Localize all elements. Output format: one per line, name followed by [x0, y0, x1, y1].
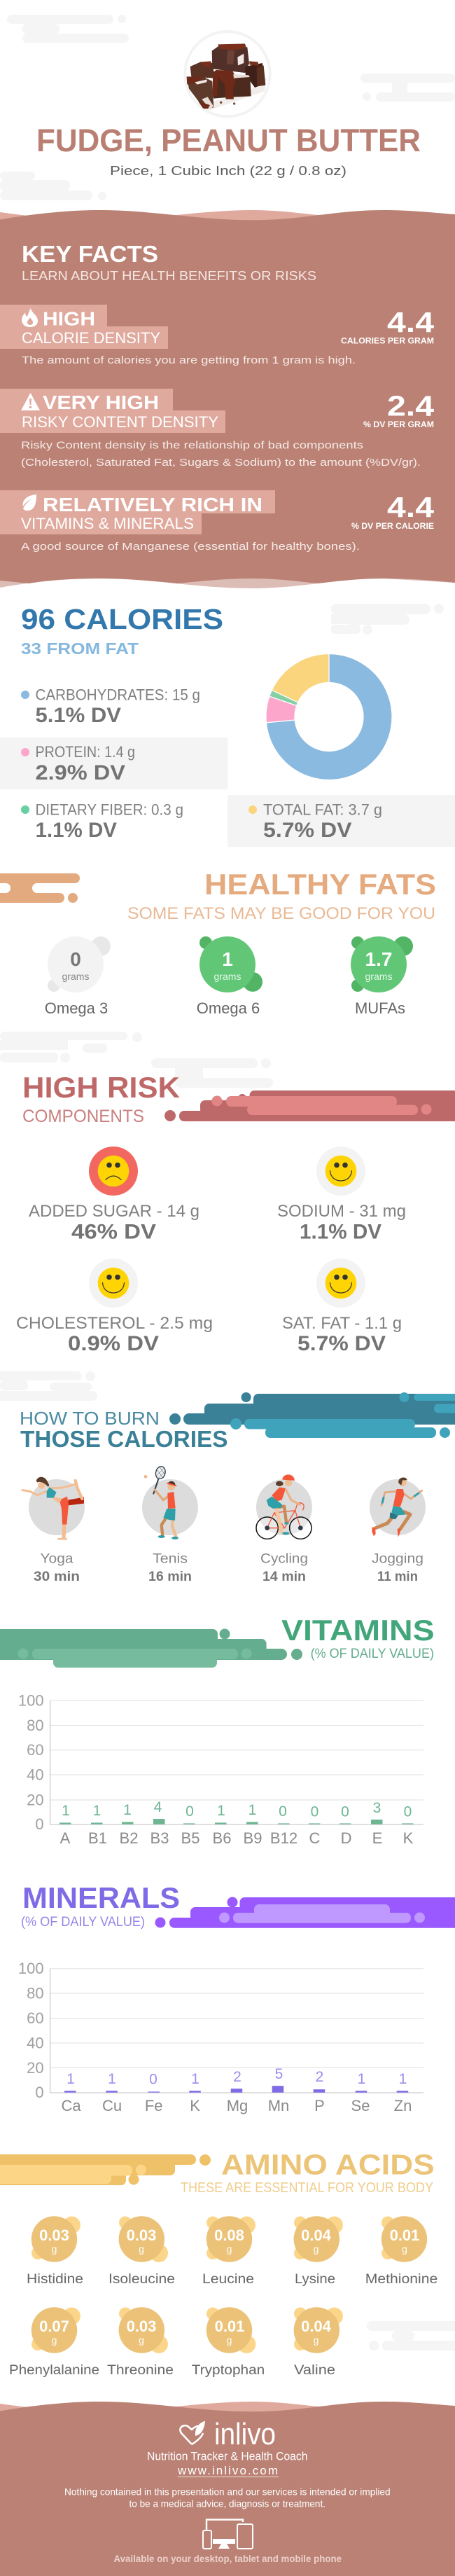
bar chart: vitamins: 1 [123, 1802, 132, 1818]
calories heading: 96 CALORIES [21, 603, 223, 635]
amino acids heading: AMINO ACIDS [221, 2149, 435, 2181]
icon: happy face [316, 1259, 365, 1308]
amino: histidine [27, 2216, 83, 2287]
footer panel [0, 2402, 455, 2576]
calories from fat: 33 FROM FAT [21, 639, 139, 658]
bar chart: vitamins: B3 [150, 1829, 169, 1847]
fact: relatively rich in vitamins and minerals: VITAMINS & MINERALS [21, 515, 194, 532]
amino: threonine: Threonine [107, 2363, 174, 2378]
amino: methionine: 0.01 [390, 2227, 419, 2244]
stat: total fat: 5.7% DV [263, 819, 351, 842]
icon: happy face [316, 1147, 365, 1196]
bar chart: vitamins: 20 [27, 1792, 44, 1808]
decorative band [0, 873, 80, 903]
amino: tryptophan: Tryptophan [192, 2363, 265, 2378]
decorative band [0, 2154, 211, 2185]
icon: sad face [89, 1147, 138, 1196]
bar chart: vitamins: B1 [88, 1829, 107, 1847]
fact: high calorie density: CALORIES PER GRAM [341, 336, 434, 346]
bar chart: vitamins: 1 [62, 1803, 70, 1819]
amino acids subheading: THESE ARE ESSENTIAL FOR YOUR BODY [181, 2180, 433, 2196]
bar chart: minerals [18, 1960, 424, 2114]
amino: histidine: Histidine [27, 2272, 83, 2287]
activity: jogging: Jogging [372, 1552, 424, 1566]
icon: yoga figure [22, 1477, 85, 1539]
badge: mufas: grams [365, 971, 392, 982]
badge: omega 6: grams [214, 971, 241, 982]
bar chart: vitamins: 0 [279, 1803, 287, 1820]
decorative band [155, 1897, 455, 1928]
amino: isoleucine [108, 2216, 175, 2287]
panel: high risk components [16, 1071, 455, 1355]
fact: relatively rich in vitamins and minerals: % DV PER CALORIE [351, 521, 434, 531]
amino: phenylalanine [9, 2307, 99, 2378]
amino: valine: g [314, 2334, 318, 2346]
fact: very high risky content density [0, 389, 434, 469]
activity: cycling [256, 1474, 312, 1584]
icon: cycling figure [256, 1474, 312, 1539]
stat: protein [21, 743, 135, 784]
amino: threonine [107, 2307, 174, 2378]
decorative cloud: amino [367, 2321, 455, 2350]
decorative band [169, 1392, 455, 1438]
bar chart: vitamins: 0 [186, 1803, 194, 1820]
stat: dietary fiber: 1.1% DV [35, 819, 117, 842]
bar chart: minerals: 2 [316, 2069, 323, 2085]
risk: sodium: SODIUM - 31 mg [277, 1202, 406, 1221]
decorative cloud: calories [331, 604, 444, 635]
bar chart: vitamins: 3 [373, 1800, 381, 1816]
activity: cycling: Cycling [260, 1552, 308, 1566]
bar chart: minerals: Mg [227, 2097, 248, 2114]
bar chart: minerals: 60 [27, 2009, 44, 2027]
activity: yoga [22, 1477, 85, 1584]
fact: high calorie density [0, 305, 434, 366]
stat: protein: 2.9% DV [35, 761, 125, 784]
activity: yoga: 30 min [34, 1570, 80, 1584]
bar chart: vitamins: 1 [248, 1802, 256, 1818]
bar chart: minerals: P [314, 2097, 325, 2114]
amino: lysine [294, 2216, 343, 2287]
vitamins subheading: (% OF DAILY VALUE) [311, 1647, 434, 1661]
bar chart: minerals: 0 [35, 2084, 44, 2101]
icon: leaf [23, 494, 36, 511]
fact: very high risky content density: (Cholesterol, Saturated Fat, Sugars & Sodium) to the amount (%DV/gr). [21, 457, 421, 469]
amino: methionine [365, 2216, 438, 2287]
decorative band [164, 1090, 455, 1121]
bar chart: minerals: 100 [18, 1960, 44, 1977]
badge: mufas: MUFAs [355, 999, 405, 1017]
risk: saturated fat: 5.7% DV [298, 1332, 386, 1355]
bar chart: minerals: 0 [149, 2072, 158, 2088]
fact: very high risky content density: VERY HIGH [43, 392, 159, 413]
badge: omega 6 [197, 936, 262, 1017]
risk: added sugar: 46% DV [71, 1220, 156, 1244]
fact: relatively rich in vitamins and minerals: 4.4 [387, 491, 434, 523]
activity: tennis: Tenis [153, 1552, 188, 1566]
stat: total fat [248, 801, 382, 842]
stat: carbohydrates [21, 686, 200, 727]
amino: phenylalanine: g [52, 2334, 57, 2346]
row backgrounds [0, 738, 455, 847]
icon: jogging figure [370, 1478, 426, 1537]
bar chart: minerals: 1 [191, 2071, 200, 2087]
bar chart: vitamins: 1 [217, 1803, 225, 1819]
bar chart: vitamins: 40 [27, 1766, 44, 1783]
bar chart: vitamins: 0 [341, 1804, 349, 1820]
key facts heading: KEY FACTS [22, 241, 158, 267]
disclaimer: Nothing contained in this presentation and our services is intended or implied [64, 2486, 391, 2498]
badge: omega 3: Omega 3 [45, 999, 108, 1017]
bar chart: minerals: 40 [27, 2034, 44, 2052]
bar chart: minerals: Se [351, 2097, 370, 2114]
website link: www.inlivo.com [177, 2464, 278, 2477]
fact: very high risky content density: % DV PER GRAM [363, 420, 434, 429]
stat: carbohydrates: CARBOHYDRATES: 15 g [35, 686, 200, 703]
bar chart: minerals: 80 [27, 1985, 44, 2002]
risk: saturated fat: SAT. FAT - 1.1 g [282, 1314, 402, 1333]
badge: omega 3: grams [62, 971, 89, 982]
fact: relatively rich in vitamins and minerals: A good source of Manganese (essential for healthy bones). [21, 541, 360, 553]
food photo: fudge brownies [185, 32, 270, 116]
bar chart: minerals: Ca [62, 2097, 81, 2114]
high risk heading: HIGH RISK [22, 1071, 180, 1104]
risk: sodium [277, 1147, 406, 1244]
stat: total fat: TOTAL FAT: 3.7 g [263, 801, 382, 818]
disclaimer [64, 2486, 391, 2509]
fact: high calorie density: HIGH [43, 308, 95, 329]
bar chart: vitamins: 60 [27, 1741, 44, 1759]
panel: minerals [18, 1881, 455, 2114]
amino: phenylalanine: 0.07 [39, 2318, 69, 2335]
amino: lysine: g [314, 2243, 318, 2255]
panel: how to burn those calories [20, 1392, 455, 1584]
bar chart: minerals: Cu [102, 2097, 122, 2114]
badge: omega 6: 1 [222, 948, 233, 970]
risk: saturated fat [282, 1259, 402, 1355]
bar chart: vitamins: B2 [120, 1829, 138, 1847]
icon: happy face [89, 1259, 138, 1308]
risk: cholesterol: CHOLESTEROL - 2.5 mg [16, 1314, 213, 1333]
availability note: Available on your desktop, tablet and mobile phone [113, 2554, 342, 2564]
amino: histidine: g [52, 2243, 57, 2255]
badge: omega 3: 0 [70, 948, 81, 970]
amino: tryptophan: 0.01 [215, 2318, 244, 2335]
fact: high calorie density: The amount of calories you are getting from 1 gram is high. [22, 354, 356, 366]
fact: very high risky content density: RISKY CONTENT DENSITY [22, 413, 218, 431]
bar chart: vitamins: C [309, 1829, 321, 1847]
activity: jogging: 11 min [377, 1570, 418, 1584]
amino: leucine: g [227, 2243, 232, 2255]
stat: dietary fiber: DIETARY FIBER: 0.3 g [35, 801, 183, 818]
amino: valine: 0.04 [301, 2318, 332, 2335]
bar chart: vitamins: K [403, 1829, 414, 1847]
fact: high calorie density: CALORIE DENSITY [22, 329, 160, 347]
fact: relatively rich in vitamins and minerals [0, 490, 434, 553]
activity: tennis: 16 min [148, 1570, 192, 1584]
panel: calories [0, 603, 455, 847]
decorative band [0, 1629, 302, 1668]
icon: devices [203, 2520, 253, 2549]
badge: omega 6: Omega 6 [197, 999, 260, 1017]
panel: key facts [0, 210, 455, 588]
amino: valine [294, 2307, 343, 2378]
risk: sodium: 1.1% DV [300, 1220, 382, 1244]
bar chart: vitamins: 0 [404, 1804, 412, 1820]
key facts subheading: LEARN ABOUT HEALTH BENEFITS OR RISKS [22, 269, 316, 283]
amino: tryptophan: g [227, 2334, 232, 2346]
minerals heading: MINERALS [22, 1881, 180, 1914]
stat: dietary fiber [21, 801, 183, 842]
bar chart: minerals: 2 [233, 2069, 241, 2085]
bar chart: vitamins: 0 [35, 1815, 44, 1833]
bar chart: vitamins: 4 [154, 1799, 162, 1815]
activity: jogging [370, 1478, 426, 1584]
amino: tryptophan [192, 2307, 265, 2378]
those calories heading: THOSE CALORIES [20, 1426, 228, 1452]
badge: omega 3 [45, 936, 111, 1017]
risk: added sugar: ADDED SUGAR - 14 g [29, 1202, 200, 1221]
panel: amino acids [0, 2149, 438, 2378]
fact: very high risky content density: Risky Content density is the relationship of bad components [21, 440, 363, 451]
bar chart: vitamins: A [60, 1829, 71, 1847]
components subheading: COMPONENTS [22, 1107, 144, 1126]
activity: yoga: Yoga [41, 1552, 74, 1566]
bar chart: minerals: Mn [268, 2097, 289, 2114]
fact: high calorie density: 4.4 [387, 306, 434, 338]
how to burn heading: HOW TO BURN [20, 1408, 160, 1429]
badge: mufas: 1.7 [365, 948, 392, 970]
decorative clouds: high risk [0, 1032, 273, 1088]
bar chart: minerals: K [190, 2097, 200, 2114]
bar chart: vitamins: B12 [270, 1829, 298, 1847]
amino: methionine: Methionine [365, 2272, 438, 2287]
bar chart: vitamins: 1 [93, 1803, 101, 1819]
amino: leucine: 0.08 [214, 2227, 244, 2244]
panel: healthy fats [0, 868, 436, 1017]
activity: cycling: 14 min [262, 1570, 306, 1584]
bar chart: vitamins [18, 1692, 424, 1847]
bar chart: vitamins: 100 [18, 1692, 44, 1709]
bar chart: vitamins: B9 [244, 1829, 262, 1847]
activity: tennis [142, 1465, 198, 1584]
fact: very high risky content density: 2.4 [387, 389, 434, 422]
panel: vitamins [0, 1614, 435, 1847]
bar chart: minerals: Zn [394, 2097, 412, 2114]
fact: relatively rich in vitamins and minerals: RELATIVELY RICH IN [43, 494, 262, 515]
amino: leucine: Leucine [202, 2272, 254, 2287]
amino: histidine: 0.03 [39, 2227, 69, 2244]
decorative cloud: burn [0, 1371, 97, 1401]
risk: added sugar [29, 1147, 200, 1244]
bar chart: vitamins: D [341, 1829, 352, 1847]
bar chart: minerals: 5 [275, 2066, 283, 2082]
amino: methionine: g [402, 2243, 407, 2255]
icon: inlivo logo heart [180, 2421, 205, 2444]
icon: warning [21, 393, 40, 410]
bar chart: vitamins: 80 [27, 1717, 44, 1734]
amino: threonine: g [139, 2334, 144, 2346]
stat: protein: PROTEIN: 1.4 g [35, 743, 135, 761]
bar chart: minerals: 1 [108, 2071, 116, 2087]
amino: isoleucine: 0.03 [127, 2227, 156, 2244]
bar chart: vitamins: E [372, 1829, 382, 1847]
amino: lysine: Lysine [295, 2272, 335, 2287]
bar chart: minerals: 1 [399, 2071, 407, 2087]
icon: tennis figure [142, 1465, 198, 1539]
decorative clouds: top [0, 15, 455, 200]
tagline: Nutrition Tracker & Health Coach [147, 2450, 308, 2463]
donut chart [266, 654, 392, 780]
bar chart: vitamins: B6 [213, 1829, 231, 1847]
amino: phenylalanine: Phenylalanine [9, 2363, 99, 2378]
amino: leucine [202, 2216, 255, 2287]
serving subtitle: Piece, 1 Cubic Inch (22 g / 0.8 oz) [110, 164, 346, 178]
healthy fats heading: HEALTHY FATS [204, 868, 436, 901]
logo wordmark: inlivo [214, 2417, 276, 2451]
amino: lysine: 0.04 [301, 2227, 332, 2244]
amino: threonine: 0.03 [127, 2318, 156, 2335]
bar chart: minerals: 1 [358, 2071, 365, 2087]
healthy fats subheading: SOME FATS MAY BE GOOD FOR YOU [127, 904, 435, 923]
amino: isoleucine: g [139, 2243, 144, 2255]
minerals subheading: (% OF DAILY VALUE) [21, 1915, 145, 1930]
bar chart: minerals: 1 [66, 2071, 75, 2087]
amino: isoleucine: Isoleucine [108, 2272, 175, 2287]
title: FUDGE, PEANUT BUTTER [36, 123, 421, 158]
amino: valine: Valine [294, 2363, 335, 2378]
disclaimer: to be a medical advice, diagnosis or treatment. [129, 2498, 326, 2509]
risk: cholesterol [16, 1259, 213, 1355]
stat: carbohydrates: 5.1% DV [35, 704, 121, 727]
risk: cholesterol: 0.9% DV [68, 1332, 159, 1355]
icon: flame [22, 308, 38, 327]
bar chart: vitamins: B5 [181, 1829, 200, 1847]
bar chart: vitamins: 0 [311, 1804, 318, 1820]
bar chart: minerals: 20 [27, 2059, 44, 2077]
vitamins heading: VITAMINS [281, 1614, 435, 1647]
badge: mufas [351, 936, 413, 1017]
bar chart: minerals: Fe [145, 2097, 163, 2114]
